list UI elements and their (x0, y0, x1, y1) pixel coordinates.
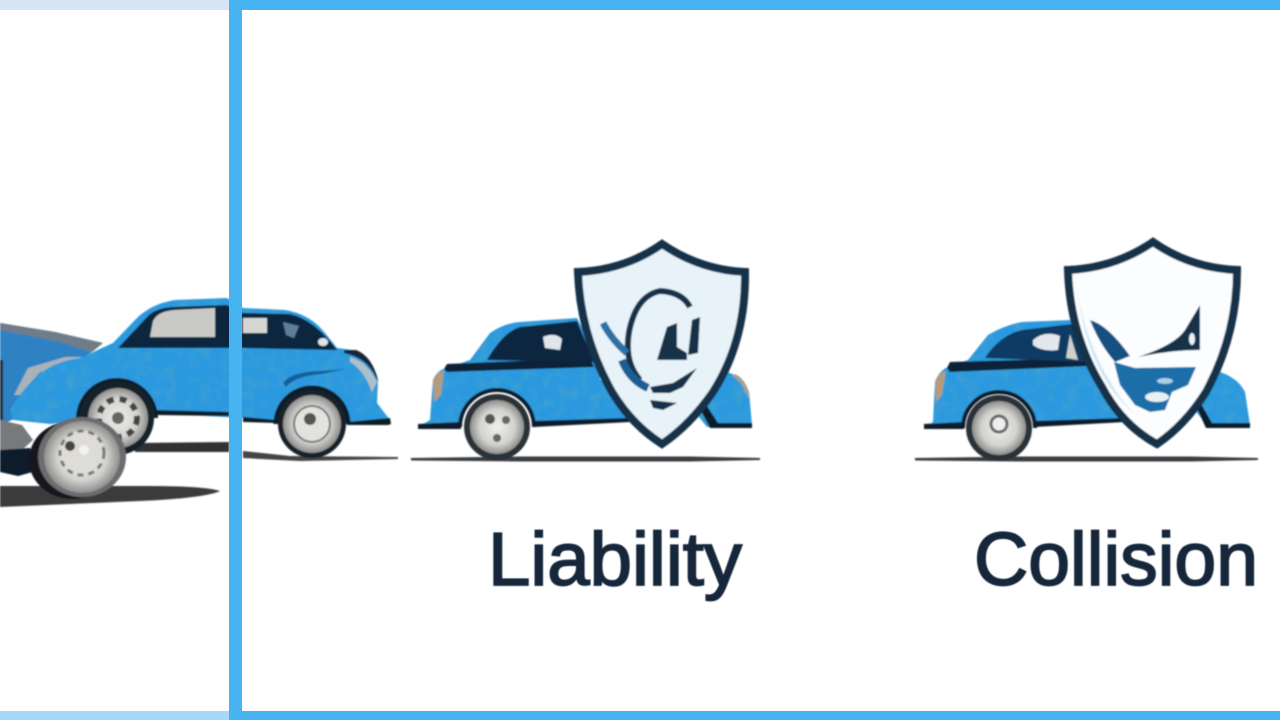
wheel: sedan front wheel (276, 388, 348, 458)
label: Collision: Collision (974, 517, 1258, 601)
car: damaged grey-blue car at far left (0, 323, 103, 476)
panel: left side strips (0, 0, 229, 720)
illustration: crashed cars on the left panel (0, 298, 398, 507)
illustration: collision car and shield (915, 242, 1258, 462)
wheel: liability car wheel (460, 390, 534, 460)
car: liability car body (418, 318, 752, 429)
ground line (915, 456, 1258, 462)
ground line (411, 456, 760, 462)
shield emblem: swirl (603, 291, 700, 410)
icon: collision shield (1068, 242, 1237, 444)
car: blue sedan crossing the divider (10, 298, 391, 425)
illustration: liability car and shield (411, 244, 760, 462)
shadow: crash ground shadows (0, 442, 398, 507)
wheel: collision car wheel (963, 392, 1035, 461)
coverage item: collision (915, 242, 1258, 601)
shield emblem: wrecked car fragment (1078, 290, 1200, 425)
wheel: sedan rear wheel (78, 380, 156, 455)
coverage item: liability (411, 244, 760, 601)
icon: liability shield (578, 244, 745, 444)
wheel: detached foreground wheel (29, 417, 126, 499)
label: Liability: Liability (488, 517, 743, 601)
car: collision car body (924, 320, 1250, 429)
